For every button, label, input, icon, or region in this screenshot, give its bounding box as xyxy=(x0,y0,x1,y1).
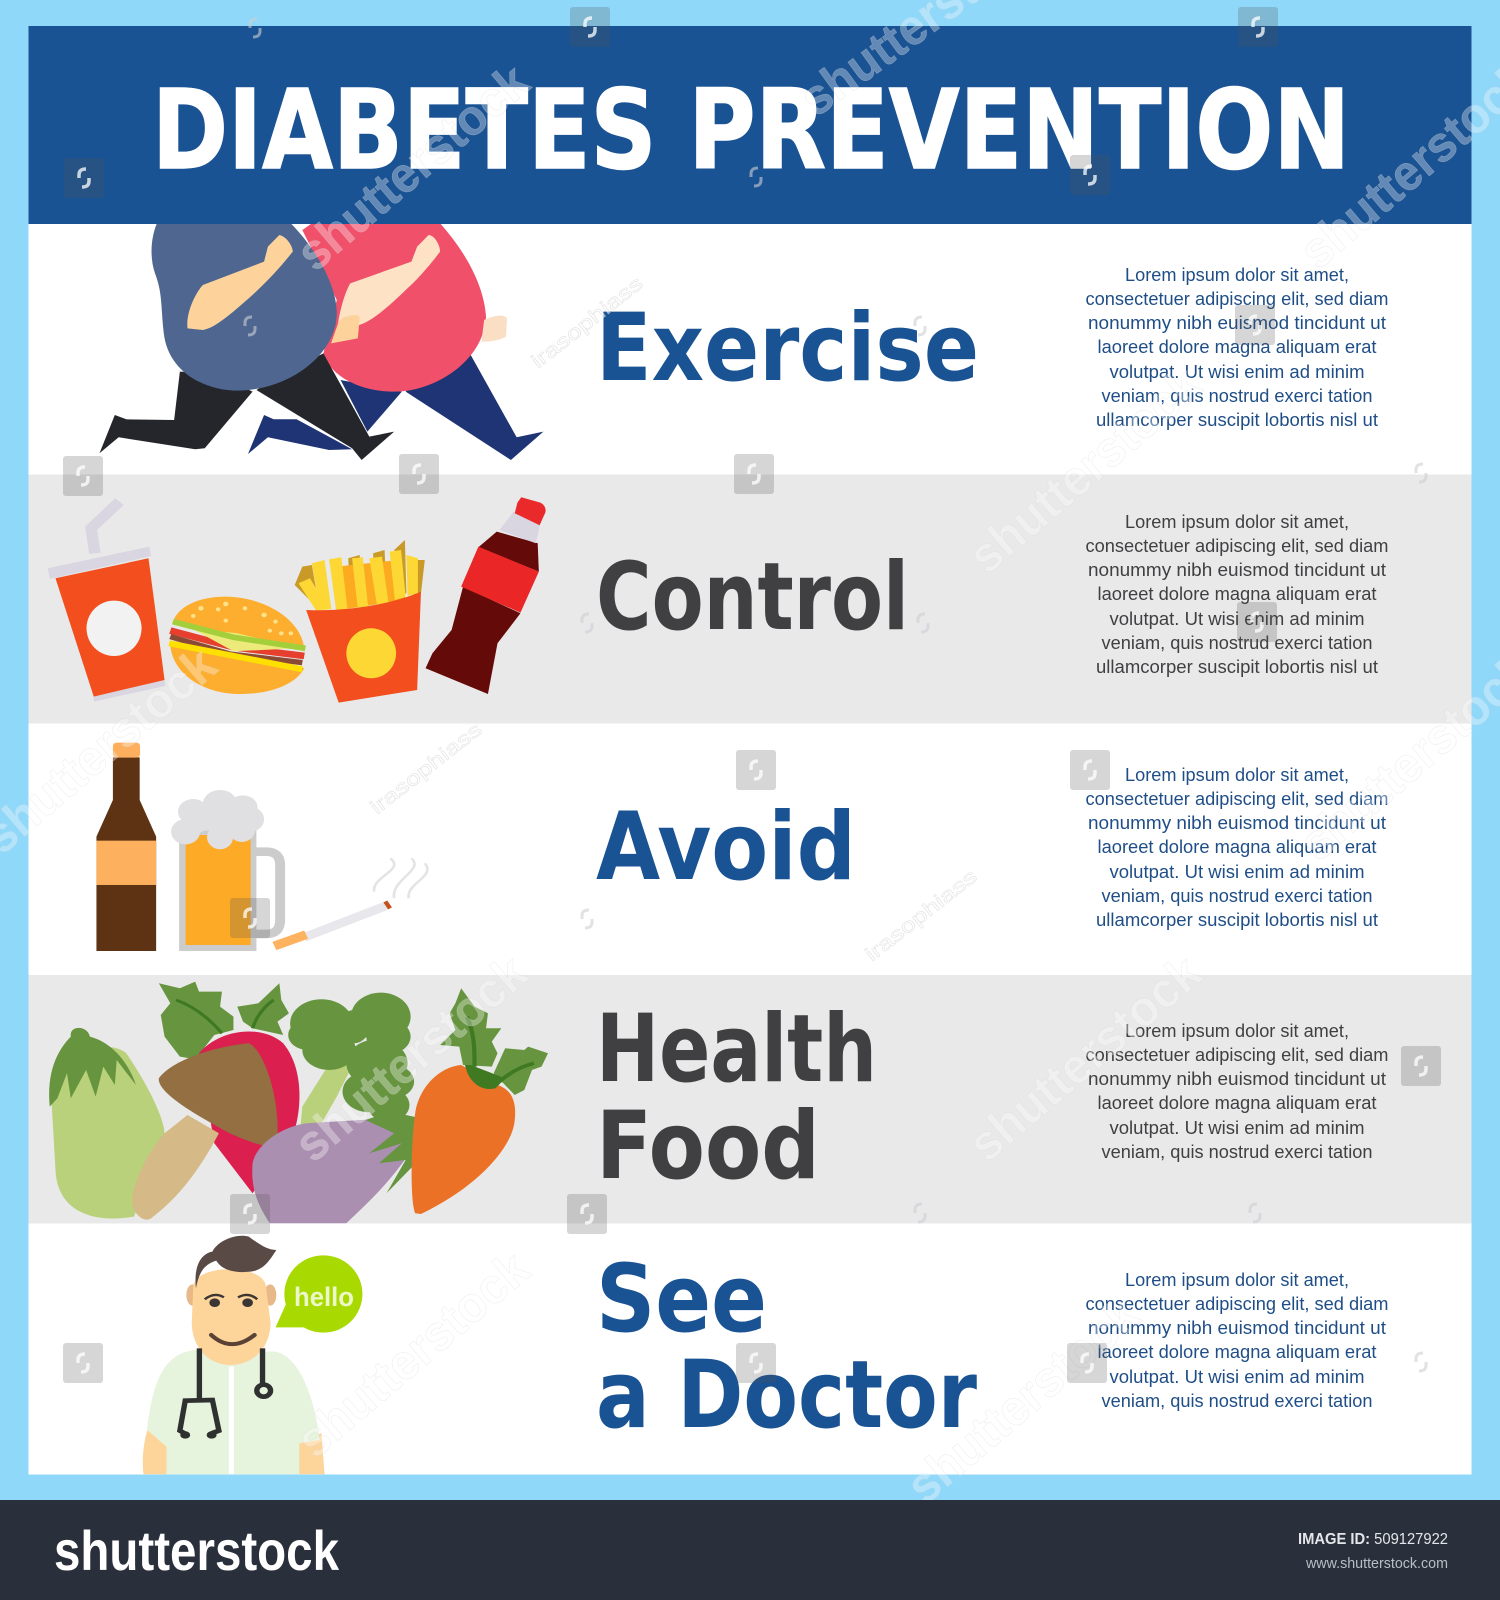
watermarks: irasophiass xyxy=(528,272,647,373)
text block: exercise: ullamcorper suscipit lobortis nisl ut xyxy=(1096,410,1378,430)
band: health food xyxy=(28,975,1472,1224)
text block: control: ullamcorper suscipit lobortis nisl ut xyxy=(1096,657,1378,677)
icon: beer mug xyxy=(171,790,280,951)
text block: avoid: consectetuer adipiscing elit, sed diam xyxy=(1086,789,1388,809)
text block: exercise: laoreet dolore magna aliquam erat xyxy=(1098,337,1376,357)
text block: health food: nonummy nibh euismod tincidunt ut xyxy=(1088,1069,1386,1089)
text block: exercise: nonummy nibh euismod tincidunt ut xyxy=(1088,313,1386,333)
watermarks: shutterstock xyxy=(286,1240,540,1468)
footer url: www.shutterstock.com xyxy=(1305,1555,1448,1572)
text block: control: veniam, quis nostrud exerci tation xyxy=(1102,633,1372,653)
text block: exercise: veniam, quis nostrud exerci tation xyxy=(1102,386,1372,406)
icon: hello speech bubble xyxy=(276,1255,362,1333)
text block: control: consectetuer adipiscing elit, sed diam xyxy=(1086,536,1388,556)
text block: health food: volutpat. Ut wisi enim ad minim xyxy=(1110,1118,1364,1138)
text block: health food xyxy=(1086,1021,1388,1162)
icon: doctor xyxy=(143,1236,325,1474)
heading: Control: Control xyxy=(596,543,909,652)
icon: soda cup xyxy=(48,502,165,702)
text block: control xyxy=(1086,512,1388,677)
icon: cigarette xyxy=(274,858,427,946)
text block: see a doctor: laoreet dolore magna aliquam erat xyxy=(1098,1342,1376,1362)
text block: exercise: Lorem ipsum dolor sit amet, xyxy=(1125,265,1349,285)
text block: see a doctor: veniam, quis nostrud exerci tation xyxy=(1102,1391,1372,1411)
icon: beetroot xyxy=(159,982,299,1193)
heading: Health Food: Food xyxy=(596,1092,820,1201)
watermarks: shutterstock xyxy=(284,944,538,1172)
heading: See a Doctor: a Doctor xyxy=(596,1341,978,1450)
text block: see a doctor xyxy=(1086,1270,1388,1411)
icon: green eggplant xyxy=(49,1028,165,1219)
icon: two overweight runners xyxy=(100,223,543,460)
watermarks: irasophiass xyxy=(862,865,981,966)
text block: see a doctor: nonummy nibh euismod tincidunt ut xyxy=(1088,1318,1386,1338)
footer logo: shutterstock xyxy=(54,1519,340,1582)
text block: health food: Lorem ipsum dolor sit amet, xyxy=(1125,1021,1349,1041)
band: exercise xyxy=(28,224,1472,474)
header banner xyxy=(28,26,1472,224)
icon: vegetables xyxy=(49,982,548,1223)
band: see a doctor xyxy=(28,1224,1472,1474)
band: avoid xyxy=(28,724,1472,975)
text block: avoid: laoreet dolore magna aliquam erat xyxy=(1098,837,1376,857)
text block: exercise: consectetuer adipiscing elit, sed diam xyxy=(1086,289,1388,309)
text block: see a doctor: Lorem ipsum dolor sit amet, xyxy=(1125,1270,1349,1290)
icon: beer bottle xyxy=(96,743,156,951)
heading: Avoid: Avoid xyxy=(596,793,856,902)
watermarks: shutterstock xyxy=(896,1286,1150,1514)
icon: mushroom xyxy=(132,1043,278,1220)
icon: hello speech bubble: hello xyxy=(294,1282,354,1312)
text block: see a doctor: volutpat. Ut wisi enim ad minim xyxy=(1110,1367,1364,1387)
heading: Exercise: Exercise xyxy=(596,294,979,403)
text block: exercise: volutpat. Ut wisi enim ad minim xyxy=(1110,362,1364,382)
text block: avoid: veniam, quis nostrud exerci tation xyxy=(1102,886,1372,906)
text block: exercise xyxy=(1086,265,1388,430)
icon: broccoli xyxy=(288,993,414,1130)
text block: avoid: Lorem ipsum dolor sit amet, xyxy=(1125,765,1349,785)
text block: see a doctor: consectetuer adipiscing elit, sed diam xyxy=(1086,1294,1388,1314)
heading: See a Doctor xyxy=(596,1245,978,1450)
watermarks: irasophiass xyxy=(367,718,486,819)
text block: health food: veniam, quis nostrud exerci tation xyxy=(1102,1142,1372,1162)
icon: carrot xyxy=(412,988,548,1214)
text block: health food: laoreet dolore magna aliquam erat xyxy=(1098,1093,1376,1113)
footer bar xyxy=(0,1500,1500,1600)
heading: Health Food: Health xyxy=(596,995,877,1104)
text block: control: Lorem ipsum dolor sit amet, xyxy=(1125,512,1349,532)
text block: control: laoreet dolore magna aliquam erat xyxy=(1098,584,1376,604)
heading: Health Food xyxy=(596,995,877,1201)
band: control xyxy=(28,474,1472,724)
text block: control: nonummy nibh euismod tincidunt ut xyxy=(1088,560,1386,580)
icon: cola bottle xyxy=(426,497,546,694)
watermarks: shutterstock xyxy=(286,53,540,281)
watermarks: shutterstock xyxy=(958,356,1212,584)
text block: avoid: volutpat. Ut wisi enim ad minim xyxy=(1110,862,1364,882)
icon: french fries xyxy=(295,540,425,703)
watermarks: shutterstock xyxy=(958,944,1212,1172)
text block: avoid xyxy=(1086,765,1388,930)
icon: hamburger xyxy=(169,597,305,694)
text block: control: volutpat. Ut wisi enim ad minim xyxy=(1110,609,1364,629)
text block: health food: consectetuer adipiscing elit, sed diam xyxy=(1086,1045,1388,1065)
icon: purple eggplant xyxy=(252,1112,437,1223)
text block: avoid: ullamcorper suscipit lobortis nisl ut xyxy=(1096,910,1378,930)
text block: avoid: nonummy nibh euismod tincidunt ut xyxy=(1088,813,1386,833)
heading: See a Doctor: See xyxy=(596,1245,767,1354)
footer image id: IMAGE ID: 509127922 xyxy=(1298,1531,1448,1548)
